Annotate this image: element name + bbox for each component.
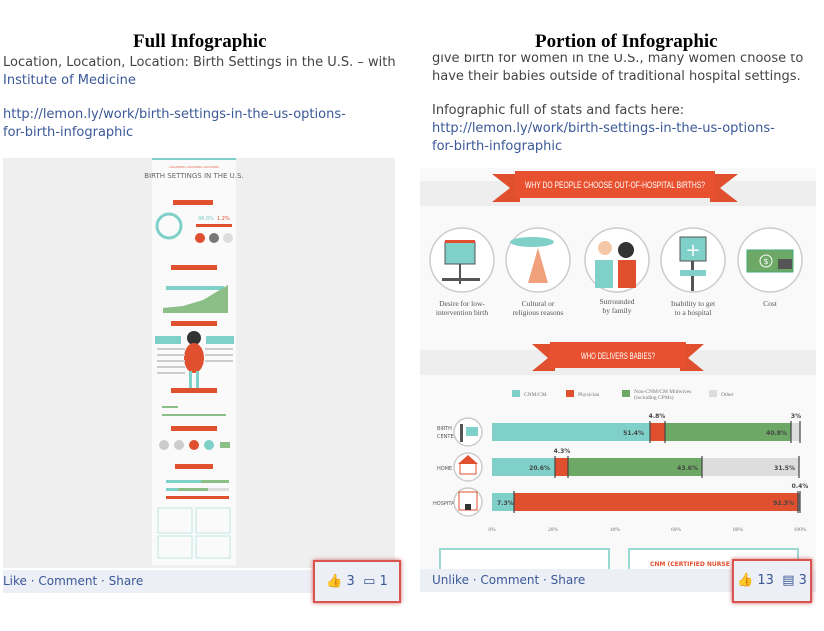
footer right: Unlike · Comment · Share	[432, 573, 585, 587]
icons: reasons: $	[763, 257, 769, 266]
row labels and icons	[433, 418, 482, 516]
axis: 100%	[794, 527, 807, 533]
banner: why do people choose	[492, 171, 738, 202]
axis: 20%	[548, 527, 558, 533]
panel: full infographic thumbnail: BIRTH SETTINGS IN THE U.S.	[144, 172, 244, 180]
legend: CNM/CM	[524, 392, 547, 398]
text block right: http://lemon.ly/work/birth-settings-in-the-us-options-	[432, 121, 775, 136]
title: portion of infographic: Portion of Infographic	[535, 31, 718, 52]
icon labels: Cost	[763, 299, 778, 308]
callout: like count right: 👍 13 ▤ 3	[737, 573, 807, 588]
callout: like count left	[313, 560, 401, 603]
row labels and icons: CENTER	[437, 434, 458, 440]
banner: who delivers babies: WHO DELIVERS BABIES?	[581, 351, 655, 361]
callout: like count left: 👍 3 ▭ 1	[326, 574, 388, 589]
row labels and icons: HOSPITAL	[433, 501, 457, 507]
icon labels: by family	[603, 306, 632, 315]
panel: infographic portion: CNM (CERTIFIED NURSE MI	[650, 561, 740, 568]
panel: full infographic thumbnail	[3, 158, 395, 568]
callout: like count right	[732, 559, 812, 603]
axis	[488, 527, 807, 533]
icon labels	[436, 297, 778, 317]
bar chart: 31.5%	[774, 465, 795, 472]
banner: who delivers babies	[532, 342, 704, 371]
footer left: Like · Comment · Share	[3, 574, 143, 588]
bar chart: 43.6%	[677, 465, 698, 472]
footer left	[3, 570, 395, 593]
bar chart: 20.6%	[529, 465, 550, 472]
text block right: have their babies outside of traditional hospital settings.	[432, 69, 801, 84]
row labels and icons: HOME	[437, 466, 452, 472]
text block left: for-birth-infographic	[3, 125, 133, 140]
bar chart	[492, 413, 808, 513]
title: full infographic: Full Infographic	[133, 31, 267, 52]
axis: 40%	[610, 527, 620, 533]
text block left: http://lemon.ly/work/birth-settings-in-the-us-options-	[3, 107, 346, 122]
legend: Non-CNM/CM Midwives	[634, 389, 691, 395]
bar chart: 4.8%	[649, 413, 665, 420]
row labels and icons: BIRTH	[437, 426, 452, 432]
text block left: Institute of Medicine	[3, 73, 136, 88]
text block right	[432, 54, 803, 154]
footer right	[420, 569, 816, 592]
text block right: for-birth-infographic	[432, 139, 562, 154]
bottom boxes	[440, 549, 609, 589]
legend: Physician	[578, 392, 600, 398]
text block left	[3, 56, 396, 140]
icon labels: Inability to get	[671, 299, 716, 308]
bar chart: 4.3%	[554, 448, 570, 455]
icon labels: intervention birth	[436, 308, 488, 317]
axis: 0%	[488, 527, 496, 533]
axis: 60%	[671, 527, 681, 533]
icons: reasons: +	[685, 240, 701, 261]
icon labels: religious reasons	[513, 308, 563, 317]
icons: reasons	[430, 228, 802, 292]
icon labels: Cultural or	[522, 299, 555, 308]
bar chart: 7.3%	[497, 500, 514, 507]
icon labels: Desire for low-	[439, 299, 485, 308]
banner: why do people choose: WHY DO PEOPLE CHOOSE OUT-OF-HOSPITAL BIRTHS?	[525, 180, 705, 190]
bar chart: 0.4%	[792, 483, 808, 490]
panel: full infographic thumbnail: 1.2%	[217, 216, 230, 222]
bar chart: 40.8%	[766, 430, 787, 437]
legend: (including CPMs)	[634, 394, 674, 401]
icon labels: to a hospital	[675, 308, 711, 317]
panel: full infographic thumbnail: 98.8%	[198, 216, 214, 222]
legend: Other	[721, 392, 734, 398]
bar chart: 51.4%	[623, 430, 644, 437]
panel: infographic portion	[420, 168, 816, 569]
bar chart: 92.3%	[773, 500, 794, 507]
axis: 80%	[733, 527, 743, 533]
legend	[512, 389, 734, 401]
text block right: Infographic full of stats and facts here:	[432, 103, 684, 118]
icon labels: Surrounded	[600, 297, 635, 306]
bar chart: 3%	[791, 413, 801, 420]
panel: full infographic thumbnail: LOCATION, LOCATION, LOCATION	[169, 165, 219, 169]
